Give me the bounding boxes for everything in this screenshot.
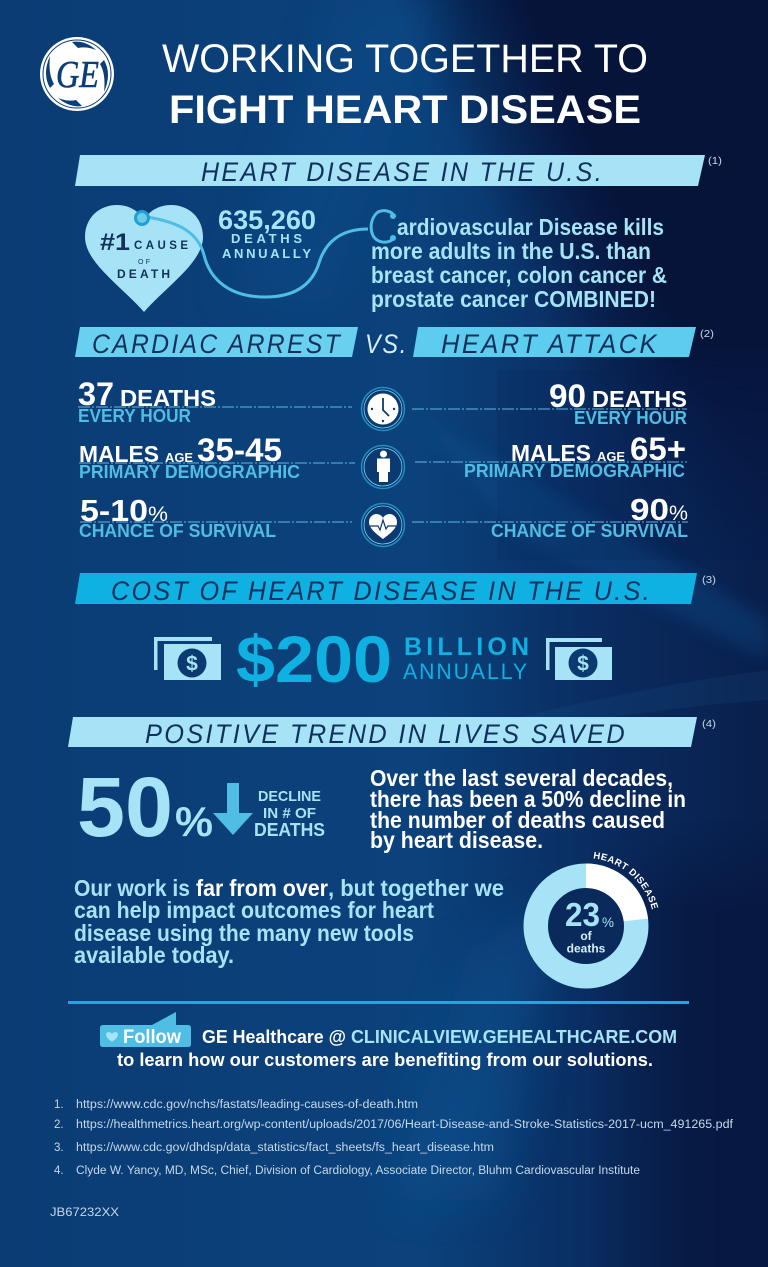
- call to action: CLINICALVIEW.GEHEALTHCARE.COM: [351, 1026, 677, 1047]
- icon: money right: [546, 638, 612, 680]
- text: decades decline: Over the last several decades,: [370, 765, 673, 791]
- banner: positive trend: POSITIVE TREND IN LIVES SAVED: [145, 719, 627, 749]
- text: decades decline: the number of deaths caused: [370, 807, 665, 833]
- follow button: Follow: [123, 1027, 181, 1048]
- right stat: males age 65+: [464, 431, 686, 481]
- stat: $200 billion annually: BILLION: [404, 633, 529, 661]
- heart with #1 cause of death: #1: [100, 229, 130, 256]
- divider line: [68, 1001, 689, 1004]
- left stat: 5-10%: CHANCE OF SURVIVAL: [79, 520, 276, 541]
- GE logo: [40, 37, 114, 111]
- label: decline in # of deaths: DEATHS: [254, 820, 325, 840]
- dashed connector lines: [78, 407, 688, 522]
- right stat: 90 deaths every hour: 90: [549, 378, 586, 414]
- text: decades decline: by heart disease.: [370, 827, 543, 853]
- text: decades decline: [370, 765, 686, 853]
- right stat: 90%: 90: [630, 492, 669, 527]
- left stat: 37 deaths every hour: 37: [78, 376, 114, 412]
- left stat: 37 deaths every hour: EVERY HOUR: [78, 406, 191, 426]
- footnote 1: (1): [708, 156, 722, 167]
- title: FIGHT HEART DISEASE: [169, 88, 641, 132]
- icon: money left: $: [186, 652, 198, 676]
- banner: cardiac arrest vs heart attack: VS.: [365, 329, 408, 359]
- references: 2.: [54, 1119, 64, 1131]
- title: WORKING TOGETHER TO: [162, 37, 648, 81]
- right stat: males age 65+: AGE: [597, 449, 625, 464]
- donut chart: 23% of deaths: 23: [565, 896, 600, 933]
- footnote 3: (3): [702, 575, 716, 586]
- stat: 50% decline: %: [175, 798, 213, 845]
- right stat: males age 65+: 65+: [630, 431, 686, 467]
- heart with #1 cause of death: DEATH: [117, 267, 170, 281]
- banner: heart disease in the U.S.: [75, 155, 705, 187]
- text: our work: can help impact outcomes for heart: [74, 897, 434, 923]
- icon: money right: $: [577, 652, 589, 676]
- label: decline in # of deaths: DECLINE: [258, 788, 321, 805]
- text: cardiovascular disease: prostate cancer COMBINED!: [371, 286, 656, 312]
- references: 1.: [54, 1099, 64, 1111]
- call to action: to learn how our customers are benefiting from our solutions.: [117, 1049, 653, 1070]
- donut chart: 23% of deaths: deaths: [567, 942, 606, 956]
- banner: cost of heart disease: COST OF HEART DISEASE IN THE U.S.: [111, 576, 652, 606]
- icon: down arrow: [213, 783, 253, 835]
- references: 3.: [54, 1142, 64, 1154]
- left stat: 37 deaths every hour: DEATHS: [120, 385, 216, 411]
- stethoscope: [136, 211, 396, 297]
- left stat: 37 deaths every hour: [78, 376, 216, 426]
- donut chart: 23% of deaths: [524, 852, 658, 988]
- stat: 50% decline: 50: [77, 760, 173, 854]
- banner: cardiac arrest vs heart attack: [75, 327, 696, 359]
- stat: 635,260 deaths annually: 635,260: [218, 205, 316, 235]
- GE logo: GE: [56, 54, 99, 96]
- text: cardiovascular disease: ardiovascular Disease kills: [397, 214, 664, 240]
- job code: JB67232XX: [50, 1207, 119, 1219]
- stat: 50% decline: [77, 760, 213, 854]
- left stat: males age 35-45: MALES: [79, 441, 159, 467]
- references: https://www.cdc.gov/nchs/fastats/leading-causes-of-death.htm: [76, 1099, 418, 1111]
- text: our work: Our work is: [74, 875, 190, 901]
- left stat: 5-10%: %: [148, 503, 168, 526]
- heart with #1 cause of death: [85, 205, 203, 312]
- stat: $200 billion annually: $200: [236, 622, 392, 696]
- right stat: 90 deaths every hour: DEATHS: [592, 386, 687, 412]
- text: decades decline: there has been a 50% decline in: [370, 786, 686, 812]
- references: Clyde W. Yancy, MD, MSc, Chief, Division of Cardiology, Associate Director, Bluhm Cardiovascular Institute: [76, 1165, 640, 1177]
- left stat: males age 35-45: AGE: [165, 450, 193, 465]
- heart with #1 cause of death: OF: [138, 259, 150, 266]
- references: https://healthmetrics.heart.org/wp-content/uploads/2017/06/Heart-Disease-and-Stroke-Statistics-2017-ucm_491265.pdf: [76, 1119, 734, 1131]
- references: https://www.cdc.gov/dhdsp/data_statistics/fact_sheets/fs_heart_disease.htm: [76, 1142, 494, 1154]
- left stat: males age 35-45: [79, 432, 300, 482]
- right stat: 90%: %: [669, 502, 688, 525]
- donut chart: 23% of deaths: of: [580, 929, 593, 943]
- left stat: 5-10%: 5-10: [80, 493, 148, 528]
- icon: clock: [362, 388, 404, 430]
- banner: cardiac arrest vs heart attack: HEART ATTACK: [441, 329, 659, 359]
- label: decline in # of deaths: [254, 788, 325, 840]
- left stat: males age 35-45: PRIMARY DEMOGRAPHIC: [79, 461, 300, 482]
- stat: 635,260 deaths annually: ANNUALLY: [222, 246, 311, 261]
- right stat: 90 deaths every hour: EVERY HOUR: [574, 408, 687, 428]
- label: decline in # of deaths: IN # OF: [263, 805, 316, 822]
- background: [208, 0, 768, 1267]
- references: [54, 1099, 734, 1177]
- text: cardiovascular disease: [371, 214, 667, 312]
- banner: heart disease in the U.S.: HEART DISEASE IN THE U.S.: [201, 157, 604, 187]
- donut chart: 23% of deaths: %: [602, 914, 614, 930]
- title: [162, 37, 648, 132]
- banner: cardiac arrest vs heart attack: CARDIAC ARREST: [92, 329, 342, 359]
- right stat: 90 deaths every hour: [549, 378, 687, 428]
- stat: $200 billion annually: [236, 622, 529, 696]
- heart with #1 cause of death: CAUSE: [134, 240, 188, 252]
- text: our work: [74, 875, 504, 968]
- footnote 2: (2): [700, 329, 714, 340]
- call to action: GE Healthcare @: [202, 1026, 346, 1047]
- footnote 4: (4): [702, 719, 716, 730]
- left stat: 5-10%: [79, 493, 276, 541]
- call to action: [117, 1026, 677, 1070]
- right stat: males age 65+: MALES: [511, 440, 591, 466]
- text: our work: disease using the many new tools: [74, 920, 414, 946]
- icon: person: [362, 446, 404, 488]
- text: cardiovascular disease: breast cancer, colon cancer &: [371, 262, 667, 288]
- text: our work: available today.: [74, 942, 234, 968]
- follow button: [100, 1012, 191, 1048]
- right stat: 90%: CHANCE OF SURVIVAL: [491, 520, 688, 541]
- right stat: males age 65+: PRIMARY DEMOGRAPHIC: [464, 460, 685, 481]
- icon: money left: [154, 637, 221, 680]
- stat: 635,260 deaths annually: DEATHS: [231, 231, 302, 246]
- text: our work: , but together we: [328, 875, 504, 901]
- icon: heart with pulse: [362, 504, 404, 546]
- right stat: 90%: [491, 492, 688, 541]
- text: our work: far from over: [196, 875, 328, 901]
- stat: 635,260 deaths annually: [218, 205, 316, 261]
- text: cardiovascular disease: more adults in the U.S. than: [371, 238, 651, 264]
- donut chart: 23% of deaths: HEART DISEASE: [594, 852, 658, 910]
- stat: $200 billion annually: ANNUALLY: [403, 659, 529, 684]
- references: 4.: [54, 1165, 64, 1177]
- left stat: males age 35-45: 35-45: [197, 432, 282, 468]
